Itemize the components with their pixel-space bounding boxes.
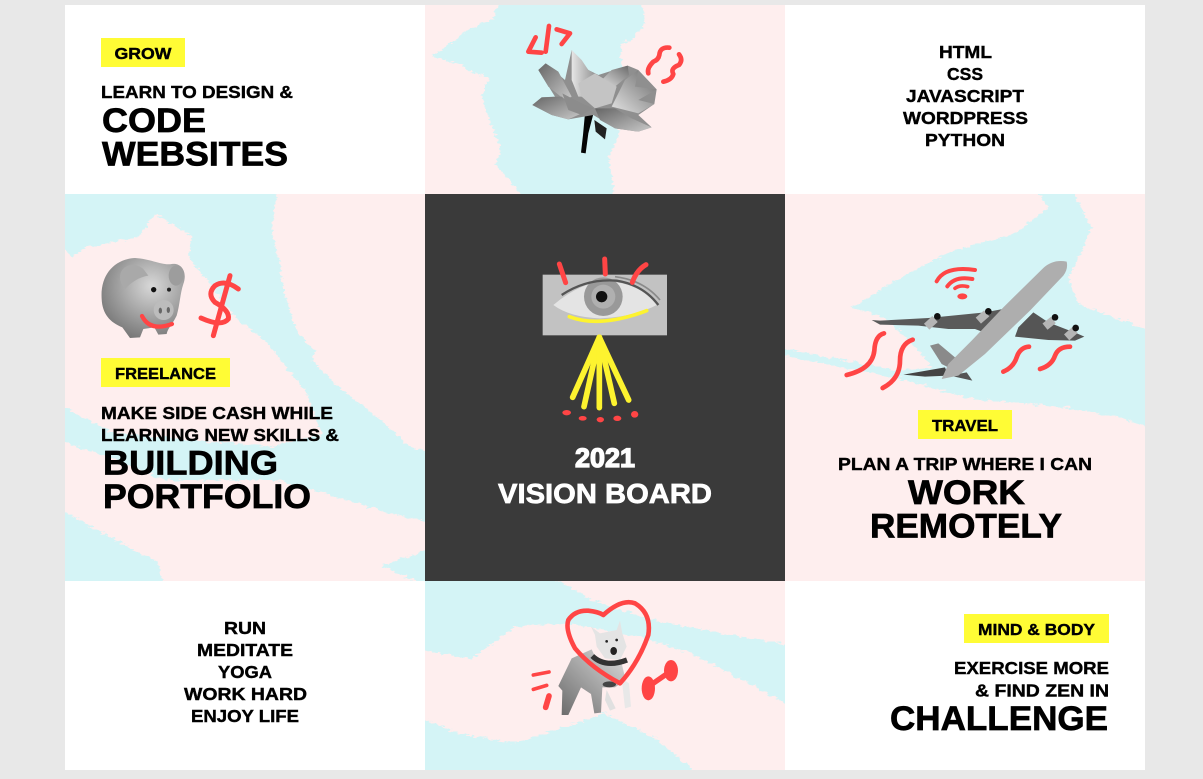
heading: work remotely: PLAN A TRIP WHERE I CAN — [838, 454, 1092, 474]
list: habits: YOGA — [218, 662, 272, 682]
brush stroke — [425, 581, 785, 770]
icon: yellow tear line and beams — [569, 311, 647, 408]
icon: red rays — [559, 259, 646, 283]
list: habits — [184, 618, 307, 726]
list: habits: MEDITATE — [197, 640, 293, 660]
icon: code brackets — [528, 26, 681, 82]
tag: travel: TRAVEL — [932, 418, 998, 435]
icon: dumbbell — [642, 660, 678, 700]
icon: red dots — [562, 410, 638, 422]
list: code skills: PYTHON — [925, 130, 1005, 150]
heading: building portfolio: MAKE SIDE CASH WHILE — [101, 403, 333, 423]
tag: mind and body — [964, 614, 1109, 643]
list: code skills: CSS — [947, 64, 983, 84]
panel: mind and body — [785, 581, 1145, 770]
panel: travel — [775, 184, 1155, 581]
icon: piggy bank — [102, 258, 185, 338]
tag: freelance — [101, 358, 230, 387]
brush stroke — [55, 184, 435, 591]
panel: skills list — [785, 5, 1145, 194]
icon: heart — [567, 602, 649, 683]
icon: wifi signal — [937, 269, 975, 299]
panel: dog illustration — [425, 581, 785, 770]
heading: building portfolio: BUILDING — [103, 444, 278, 482]
heading: code websites — [101, 82, 293, 174]
heading: building portfolio: LEARNING NEW SKILLS & — [101, 425, 339, 445]
panel: habits list — [65, 581, 425, 770]
tag: mind and body: MIND & BODY — [978, 622, 1095, 639]
icon: dog — [558, 621, 631, 715]
tag: grow: GROW — [114, 46, 172, 63]
icon: motion lines — [533, 672, 549, 707]
list: habits: WORK HARD — [184, 684, 307, 704]
heading: building portfolio — [101, 403, 339, 516]
icon: smile — [142, 316, 172, 327]
panel: grow — [65, 5, 425, 194]
tag: travel — [918, 410, 1012, 439]
heading: challenge: CHALLENGE — [890, 700, 1108, 738]
title — [498, 443, 712, 509]
heading: work remotely — [839, 458, 1091, 538]
heading: code websites: CODE — [102, 102, 206, 140]
panel: lotus illustration — [425, 0, 785, 197]
icon: lotus flower — [532, 50, 657, 153]
heading: work remotely: WORK — [908, 474, 1025, 512]
brush stroke — [432, 0, 645, 197]
icon: eye — [543, 275, 667, 335]
icon: airplane — [872, 261, 1084, 381]
heading: code websites: WEBSITES — [102, 136, 288, 174]
list: code skills — [903, 42, 1028, 150]
icon: exhaust squiggles — [847, 333, 1070, 388]
list: code skills: JAVASCRIPT — [906, 86, 1024, 106]
list: habits: ENJOY LIFE — [191, 706, 299, 726]
list: habits: RUN — [224, 618, 266, 638]
heading: code websites: LEARN TO DESIGN & — [101, 82, 293, 102]
title: 2021 — [575, 443, 635, 473]
heading: building portfolio: PORTFOLIO — [103, 478, 311, 516]
title: VISION BOARD — [498, 478, 712, 509]
brush stroke — [785, 194, 1145, 426]
list: code skills: WORDPRESS — [903, 108, 1028, 128]
tag: freelance: FREELANCE — [115, 366, 216, 383]
icon: dollar sign — [201, 276, 238, 336]
list: code skills: HTML — [939, 42, 992, 62]
tag: grow — [101, 38, 185, 67]
panel: freelance — [55, 184, 435, 591]
heading: work remotely: REMOTELY — [870, 508, 1062, 546]
panel: center title — [425, 194, 785, 581]
heading: challenge: EXERCISE MORE — [954, 658, 1109, 678]
heading: challenge: & FIND ZEN IN — [975, 680, 1109, 700]
heading: challenge — [890, 658, 1109, 738]
